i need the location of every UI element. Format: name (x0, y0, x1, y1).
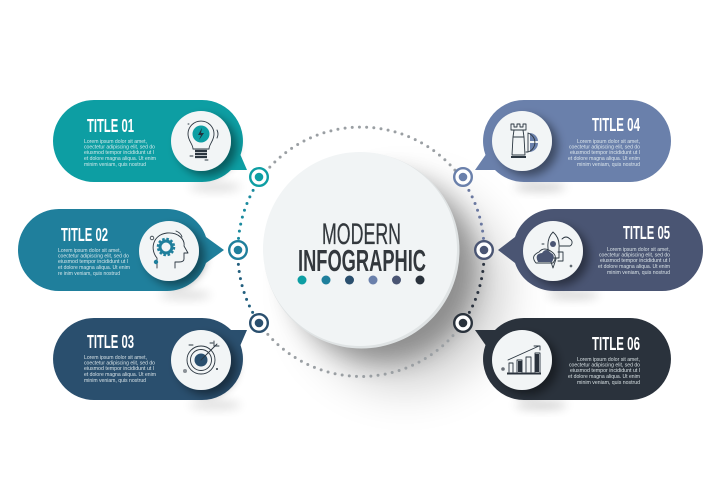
icon: head with gear (139, 221, 199, 281)
title 06 body: Lorem ipsum dolor sit amet, (577, 357, 640, 363)
heading: MODERN: MODERN (322, 218, 401, 251)
title 05 body (598, 247, 670, 276)
node 03 (250, 314, 268, 332)
title 04 body (568, 139, 640, 168)
panel: title 01 (53, 100, 247, 182)
title 02 body: et dolore magna aliqua. Ut enim (58, 265, 130, 271)
panel: title 06 (475, 318, 671, 400)
title 01 body: coectetur adipiscing elit, sed do (84, 144, 155, 150)
title 03 heading: TITLE 03 (87, 331, 134, 352)
title 01 body (84, 139, 156, 168)
title 03 body: eiusmod tempor incididunt ut l (84, 366, 154, 372)
node 04 (454, 168, 472, 186)
title 05 body: et dolore magna aliqua. Ut enim (598, 264, 670, 270)
title 06 body: eiusmod tempor incididunt ut l (570, 368, 640, 374)
node 01 (250, 168, 268, 186)
title 03 body: et dolore magna aliqua. Ut enim (84, 372, 156, 378)
heading: INFOGRAPHIC: INFOGRAPHIC (298, 243, 426, 278)
title 06 body: minim veniam, quis nostrud (577, 380, 640, 386)
title 04 heading: TITLE 04 (592, 114, 640, 135)
node 02 (229, 241, 247, 259)
title 04 body: Lorem ipsum dolor sit amet, (577, 139, 640, 145)
title 03 body (84, 355, 156, 384)
icon: chess rook and pie (492, 111, 552, 171)
title 04 body: minim veniam, quis nostrud (577, 162, 640, 168)
title 05 body: minim veniam, quis nostrud (607, 270, 670, 276)
panel: title 04 (475, 100, 671, 182)
panel: title 02 (18, 209, 224, 291)
icon: target with arrow (171, 330, 231, 390)
node 05 (475, 241, 493, 259)
title 02 body: re inim veniam, quis nostrud (58, 271, 120, 277)
title 02 body: coectetur adipiscing elit, sed do (58, 254, 129, 260)
title 02 body (58, 248, 130, 277)
title 05 body: coectetur adipiscing elit, sed do (599, 252, 670, 258)
title 04 body: coectetur adipiscing elit, sed do (569, 144, 640, 150)
icon: rocket and clouds (523, 221, 583, 281)
center circle shadow (159, 174, 599, 409)
icon: growth bar chart (492, 330, 552, 390)
title 06 body: coectetur adipiscing elit, sed do (569, 362, 640, 368)
title 05 body: Lorem ipsum dolor sit amet, (607, 247, 670, 253)
title 05 body: eiusmod tempor incididunt ut l (600, 258, 670, 264)
title 03 body: Lorem ipsum dolor sit amet, (84, 355, 147, 361)
title 03 body: minim veniam, quis nostrud (84, 378, 146, 384)
title 02 heading: TITLE 02 (61, 224, 108, 245)
dotted ring (238, 127, 484, 376)
color dots (298, 276, 424, 284)
panel: title 03 (53, 318, 247, 400)
title 01 body: eiusmod tempor incididunt ut l (84, 150, 154, 156)
title 01 body: et dolore magna aliqua. Ut enim (84, 156, 156, 162)
title 03 body: coectetur adipiscing elit, sed do (84, 360, 155, 366)
icon: light bulb (171, 111, 231, 171)
panel: title 05 (498, 209, 703, 291)
title 04 body: eiusmod tempor incididunt ut l (570, 150, 640, 156)
title 02 body: Lorem ipsum dolor sit amet, (58, 248, 121, 254)
title 01 body: Lorem ipsum dolor sit amet, (84, 139, 147, 145)
node 06 (454, 314, 472, 332)
title 04 body: et dolore magna aliqua. Ut enim (568, 156, 640, 162)
title 01 heading: TITLE 01 (87, 115, 134, 136)
title 02 body: eiusmod tempor incididunt ut l (58, 259, 128, 265)
title 06 heading: TITLE 06 (592, 333, 640, 354)
title 01 body: minim veniam, quis nostrud (84, 162, 146, 168)
title 06 body (568, 357, 640, 386)
title 05 heading: TITLE 05 (623, 222, 670, 243)
center circle (263, 152, 460, 348)
title 06 body: et dolore magna aliqua. Ut enim (568, 374, 640, 380)
